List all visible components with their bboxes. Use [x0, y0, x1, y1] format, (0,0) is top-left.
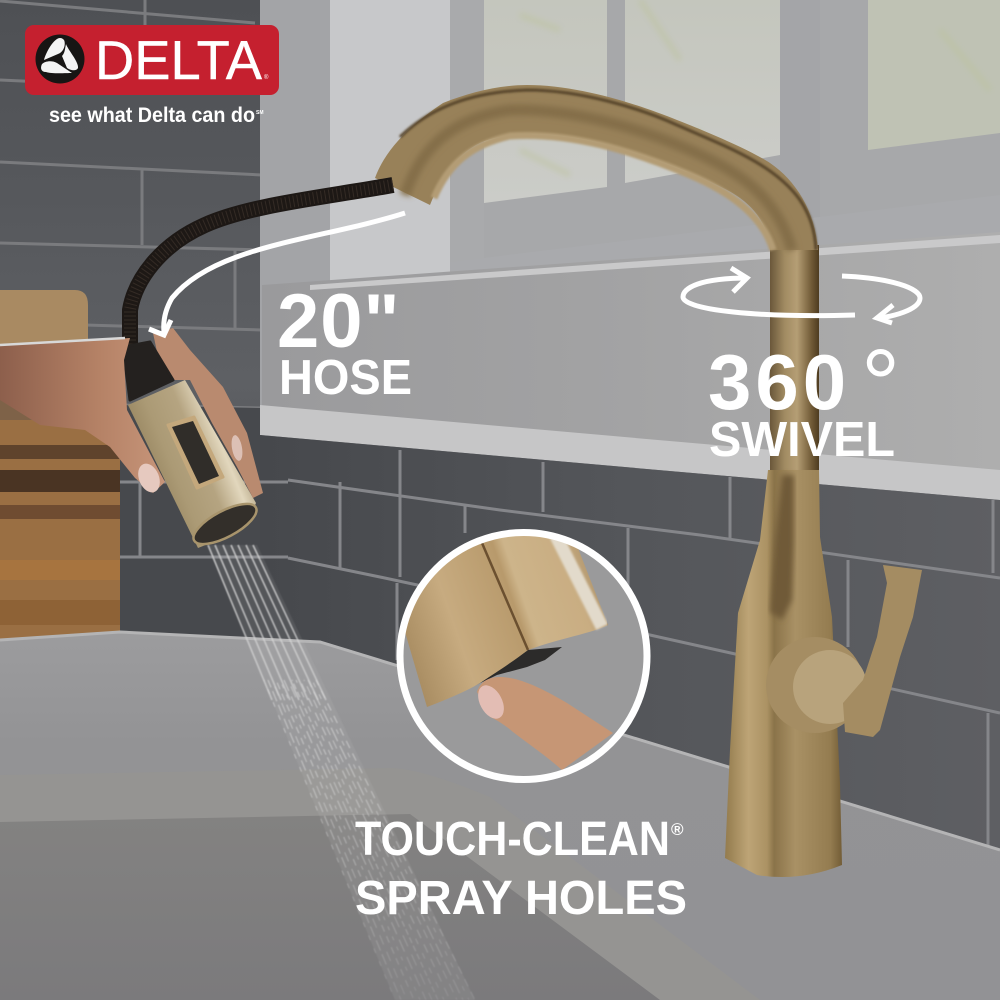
faucet lever — [843, 565, 922, 737]
label: 360 swivel: 360 — [708, 338, 850, 426]
label: touch-clean spray holes: TOUCH-CLEAN — [355, 813, 670, 866]
sprayer collar — [123, 342, 173, 400]
arm highlight — [0, 338, 125, 345]
tagline: SM — [256, 110, 264, 116]
inset sprayer head — [405, 520, 608, 707]
label: touch-clean spray holes — [355, 813, 687, 925]
fingernail — [230, 434, 244, 462]
label: touch-clean spray holes: SPRAY HOLES — [355, 872, 687, 925]
label: 20 inch hose — [277, 279, 412, 405]
registered mark: ® — [264, 74, 269, 81]
inset highlight — [553, 530, 602, 627]
hose — [130, 185, 393, 345]
faucet spout arc — [375, 85, 818, 250]
sprayer button — [168, 417, 223, 488]
sprayer head — [128, 380, 256, 548]
inset fingernail — [478, 685, 504, 719]
inset head seam — [482, 543, 528, 650]
countertop — [0, 632, 1000, 1000]
fingers — [153, 328, 263, 498]
logo: Delta badge — [25, 25, 279, 95]
label: 20 inch hose: HOSE — [279, 351, 412, 405]
faucet — [375, 85, 922, 877]
logo wordmark: DELTA — [95, 29, 262, 91]
inset circle: touch-clean spray holes — [400, 520, 648, 780]
label: 360 swivel — [708, 329, 900, 467]
window sill — [260, 232, 1000, 500]
faucet handle hub — [766, 637, 864, 733]
water spray — [208, 545, 475, 1000]
window frame — [260, 0, 1000, 410]
faucet riser — [770, 245, 819, 471]
label: 360 swivel: SWIVEL — [709, 413, 895, 467]
hose arrow — [149, 213, 405, 335]
spray face — [188, 496, 262, 552]
forearm, palm and thumb — [0, 338, 165, 493]
logo mark — [36, 34, 84, 84]
swivel arrows — [683, 268, 920, 323]
tagline: see what Delta can do — [49, 104, 255, 127]
inset finger — [477, 677, 613, 770]
label: 360 swivel: ° — [861, 329, 900, 439]
inset spray holes — [478, 647, 562, 684]
faucet handle ball — [793, 650, 867, 724]
hand holding sprayer — [0, 328, 263, 552]
thumbnail — [134, 460, 164, 496]
label: 20 inch hose: 20" — [277, 279, 401, 364]
faucet body — [725, 470, 842, 877]
faucet body shadow — [770, 475, 794, 620]
cutting board — [0, 290, 120, 642]
label: touch-clean spray holes: ® — [671, 820, 684, 839]
tile backsplash — [118, 405, 1000, 850]
